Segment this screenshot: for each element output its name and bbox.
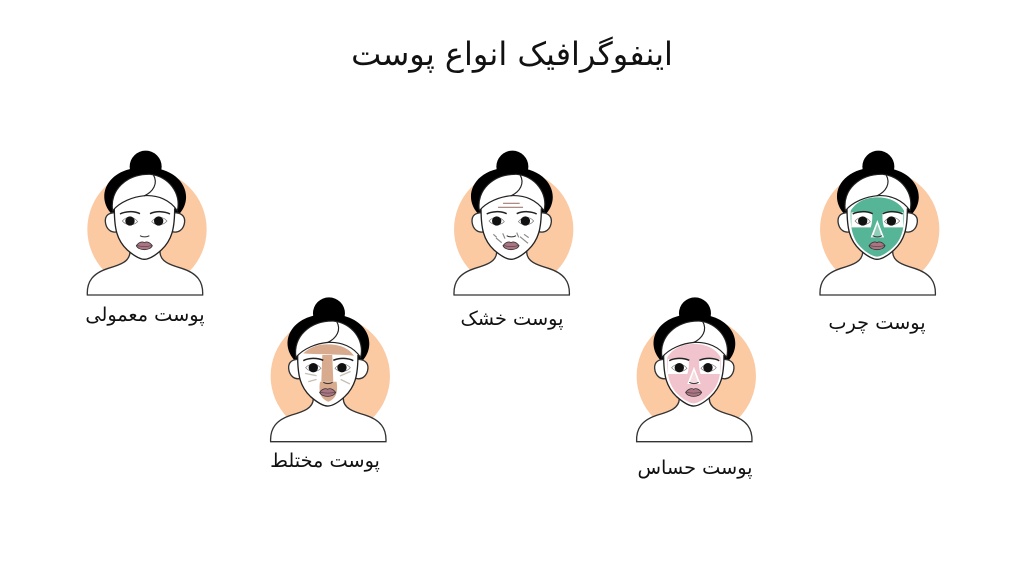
figure: dry skin: [454, 151, 573, 295]
figure: sensitive skin: [637, 297, 756, 442]
figure: combination skin: [271, 297, 390, 442]
mask: oily skin green: [851, 197, 904, 257]
title: اینفوگرافیک انواع پوست: [351, 35, 673, 73]
label: dry skin: پوست خشک: [461, 307, 563, 330]
label: sensitive skin: پوست حساس: [637, 456, 753, 479]
figure: oily skin: [820, 151, 939, 295]
label: normal skin: پوست معمولی: [85, 303, 205, 326]
mask: combination skin patches: [303, 344, 354, 402]
label: oily skin: پوست چرب: [828, 311, 926, 334]
mask: dry skin wrinkles: [493, 203, 529, 243]
figure: normal skin: [87, 151, 207, 295]
mask: sensitive skin pink: [667, 344, 721, 403]
label: combination skin: پوست مختلط: [270, 449, 380, 472]
